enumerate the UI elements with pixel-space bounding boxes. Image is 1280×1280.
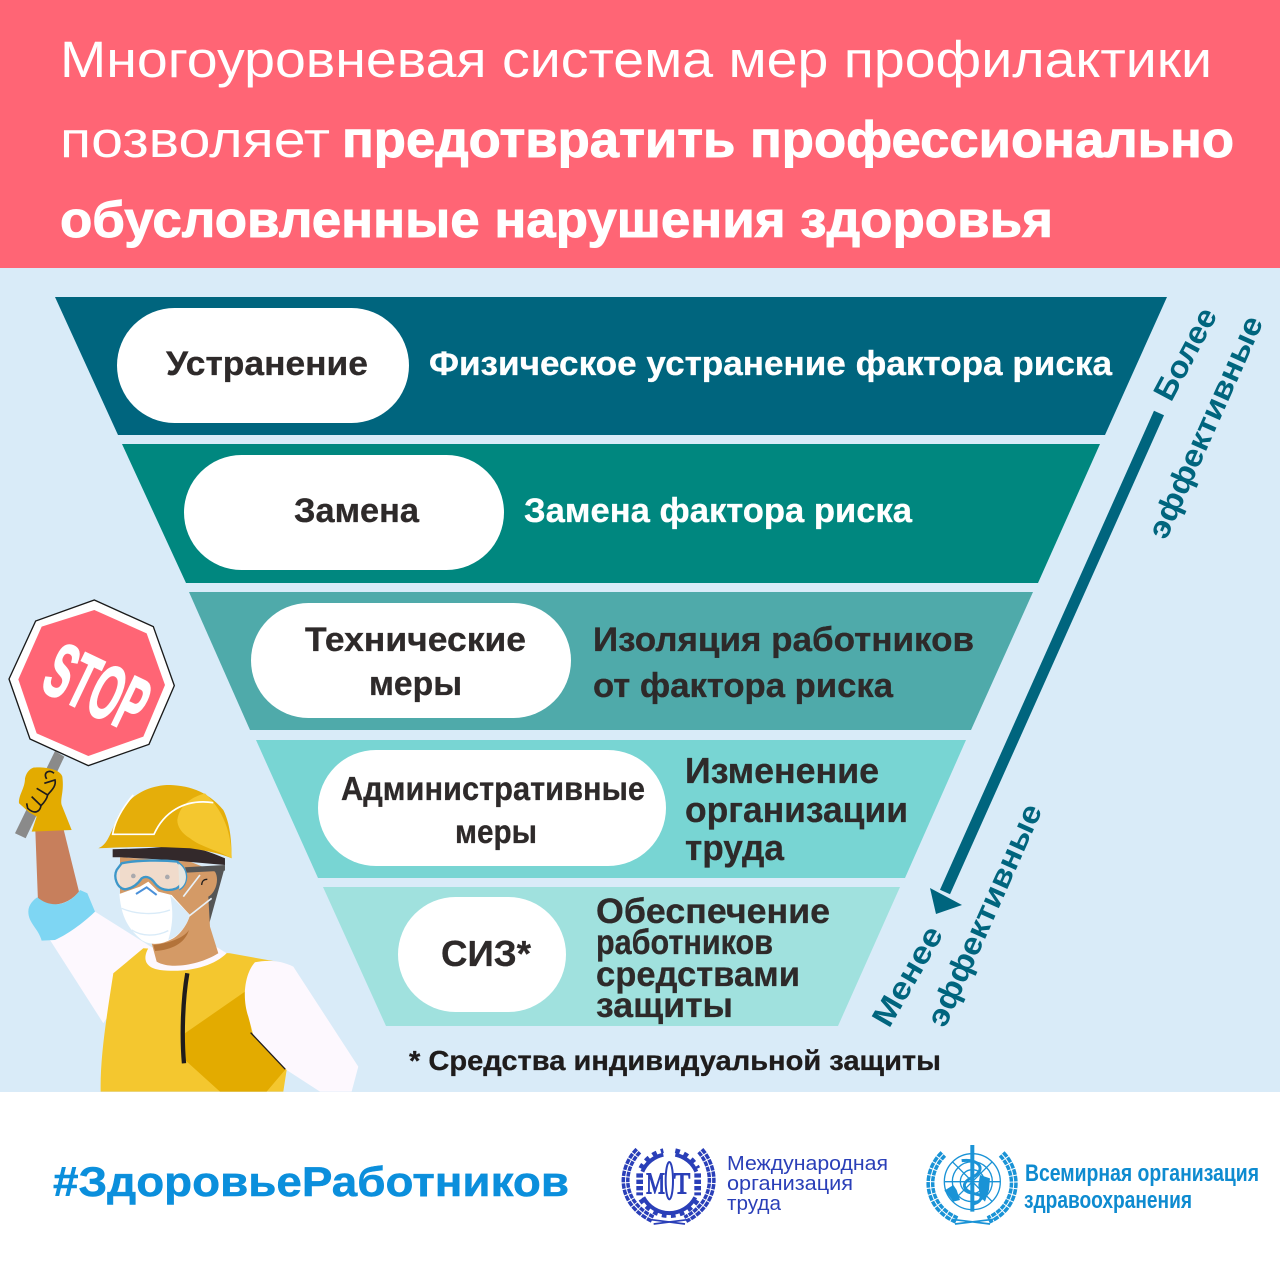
funnel tier: elimination: Физическое устранение фактора риска	[429, 345, 1113, 383]
effectiveness arrow	[930, 413, 1159, 914]
title line 2: позволяет	[60, 111, 330, 168]
funnel tier: administrative controls: меры	[455, 813, 537, 850]
ear detail	[202, 879, 207, 885]
hashtag: #ЗдоровьеРаботников	[53, 1158, 569, 1205]
title line 2: предотвратить профессионально	[342, 111, 1234, 168]
mask nose clip	[136, 887, 157, 895]
funnel tier: administrative controls: организации	[685, 789, 908, 830]
yellow vest	[101, 948, 287, 1092]
stop sign: STOP	[31, 627, 162, 749]
funnel tier: administrative controls	[256, 740, 966, 878]
hair back	[200, 867, 225, 923]
mask fold lines	[122, 908, 170, 935]
illustration: worker with stop sign	[9, 600, 358, 1092]
funnel tier: engineering controls	[189, 592, 1033, 730]
ILO letters: М	[646, 1166, 665, 1200]
funnel tier: personal protective equipment: Обеспечение	[596, 892, 830, 931]
hair	[113, 845, 225, 865]
white sleeve left	[50, 912, 153, 1023]
sign pole	[15, 751, 64, 838]
goggle side lens	[178, 863, 187, 890]
label: more effective: эффективные	[1140, 310, 1270, 544]
ILO name: Международная	[727, 1153, 888, 1175]
title line 3: обусловленные нарушения здоровья	[60, 191, 1053, 248]
funnel tier: substitution: Замена	[294, 492, 420, 530]
funnel tier: personal protective equipment	[323, 887, 900, 1026]
stop sign	[9, 600, 174, 766]
ILO letter O	[666, 1162, 673, 1199]
label: less effective: эффективные	[919, 798, 1049, 1032]
ILO letters: Т	[674, 1166, 691, 1200]
neck shadow	[153, 930, 189, 951]
logo: WHO emblem	[930, 1145, 1014, 1224]
WHO snake	[962, 1160, 981, 1204]
funnel tier: personal protective equipment: защиты	[596, 986, 733, 1025]
mask straps	[183, 875, 212, 917]
funnel tier: elimination	[55, 297, 1167, 435]
funnel tier: engineering controls: меры	[369, 665, 462, 703]
eyes	[131, 874, 170, 879]
ILO gear	[640, 1151, 698, 1216]
glove finger lines	[27, 771, 55, 812]
footnote: * Средства индивидуальной защиты	[409, 1045, 941, 1076]
logo: ILO emblem	[626, 1151, 712, 1224]
WHO name	[1024, 1160, 1259, 1214]
funnel tier: elimination: Устранение	[166, 345, 368, 383]
funnel tier: administrative controls: Изменение	[685, 750, 879, 791]
WHO name: здравоохранения	[1024, 1187, 1192, 1214]
vest shadow	[185, 992, 285, 1092]
glove	[19, 767, 72, 832]
WHO wreath	[930, 1154, 1014, 1224]
ILO wreath	[626, 1151, 712, 1224]
funnel tier: engineering controls: Технические	[305, 621, 526, 659]
ILO letters	[646, 1166, 691, 1200]
funnel tier: administrative controls: труда	[685, 827, 785, 868]
WHO globe	[944, 1154, 1000, 1210]
ILO name: труда	[727, 1193, 782, 1215]
label: more effective: Более	[1146, 302, 1224, 406]
goggles	[115, 861, 183, 890]
funnel tier: substitution: Замена фактора риска	[524, 492, 913, 530]
funnel tier: personal protective equipment: работников	[596, 923, 773, 962]
helmet	[98, 785, 232, 858]
ILO name	[727, 1153, 888, 1215]
mask	[119, 882, 190, 944]
title line 1: Многоуровневая система мер профилактики	[60, 31, 1212, 88]
sleeve seam	[251, 1033, 285, 1069]
funnel tier: personal protective equipment: СИЗ*	[441, 933, 531, 974]
funnel tier: engineering controls: Изоляция работников	[593, 621, 974, 659]
ILO name: организация	[727, 1173, 853, 1195]
zipper	[183, 973, 187, 1063]
helmet white line	[113, 795, 213, 834]
face and neck	[120, 857, 218, 966]
white sleeve right	[245, 961, 358, 1092]
header banner	[0, 0, 1280, 268]
mask shade	[168, 895, 190, 940]
funnel tier: administrative controls: Административные	[341, 770, 645, 807]
goggle strap	[185, 865, 225, 873]
blue cuff	[28, 890, 95, 941]
WHO map	[944, 1175, 990, 1202]
funnel tier: engineering controls: от фактора риска	[593, 667, 894, 705]
funnel tier: substitution	[122, 444, 1100, 583]
raised arm	[35, 828, 79, 905]
funnel tier: personal protective equipment: средствами	[596, 955, 800, 994]
helmet lobe	[177, 793, 232, 858]
label: less effective: Менее	[865, 920, 950, 1032]
label: less effective	[865, 798, 1049, 1032]
WHO staff	[966, 1145, 978, 1212]
white collar	[145, 937, 227, 971]
